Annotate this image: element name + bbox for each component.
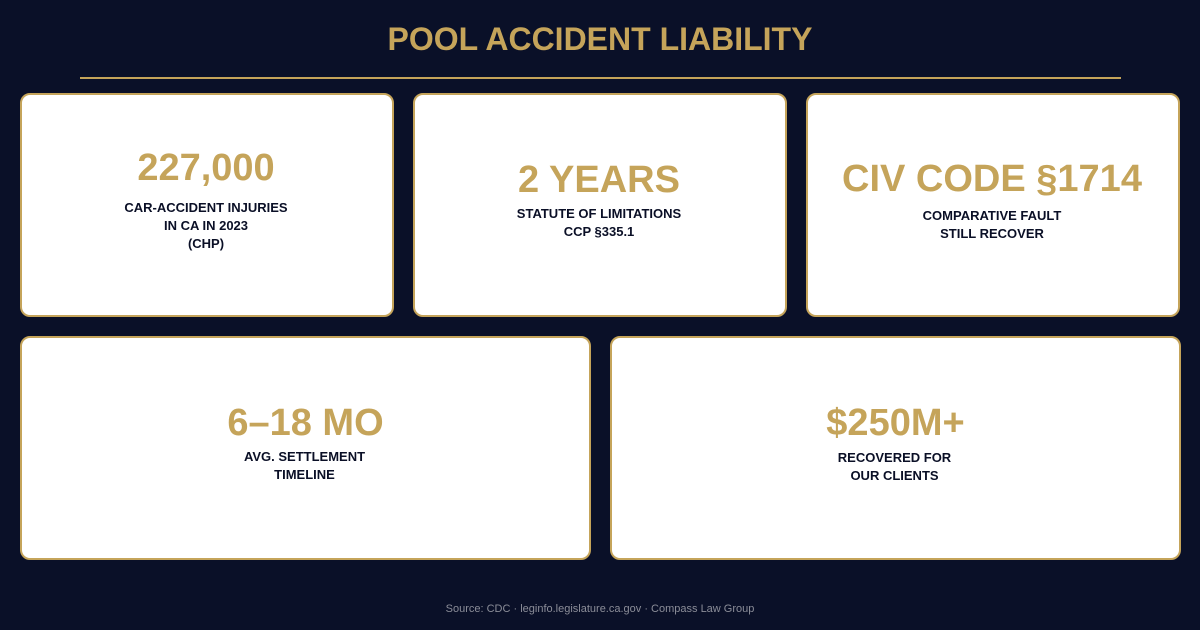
title: POOL ACCIDENT LIABILITY [388,21,812,57]
stat: 2 years: 2 YEARS [518,159,680,201]
label: injuries: (CHP) [188,236,224,251]
label: recovered [838,450,951,483]
label: comparative fault: COMPARATIVE FAULT [923,208,1061,223]
panel: recovered [610,336,1181,560]
label: injuries: CAR-ACCIDENT INJURIES [124,200,288,215]
panel: statute of limitations [413,93,787,317]
footer source: Source: CDC · leginfo.legislature.ca.gov · Compass Law Group [446,603,754,615]
label: comparative fault: STILL RECOVER [940,226,1044,241]
label: settlement: TIMELINE [274,467,335,482]
stat: 6-18 mo: 6–18 MO [227,402,384,444]
label: statute: CCP §335.1 [564,224,634,239]
label: comparative fault [923,208,1062,241]
panel: car-accident injuries [20,93,394,317]
label: injuries [124,200,288,251]
stat: $250M+: $250M+ [826,402,965,444]
panel: settlement timeline [20,336,591,560]
panel: comparative fault [806,93,1180,317]
label: settlement: AVG. SETTLEMENT [244,449,365,464]
stat: 227,000: 227,000 [137,147,275,189]
label: injuries: IN CA IN 2023 [164,218,248,233]
label: recovered: OUR CLIENTS [850,468,939,483]
label: statute [517,206,681,239]
label: settlement [244,449,365,482]
label: recovered: RECOVERED FOR [838,450,951,465]
stat: civ code: CIV CODE §1714 [842,158,1142,200]
label: statute: STATUTE OF LIMITATIONS [517,206,681,221]
